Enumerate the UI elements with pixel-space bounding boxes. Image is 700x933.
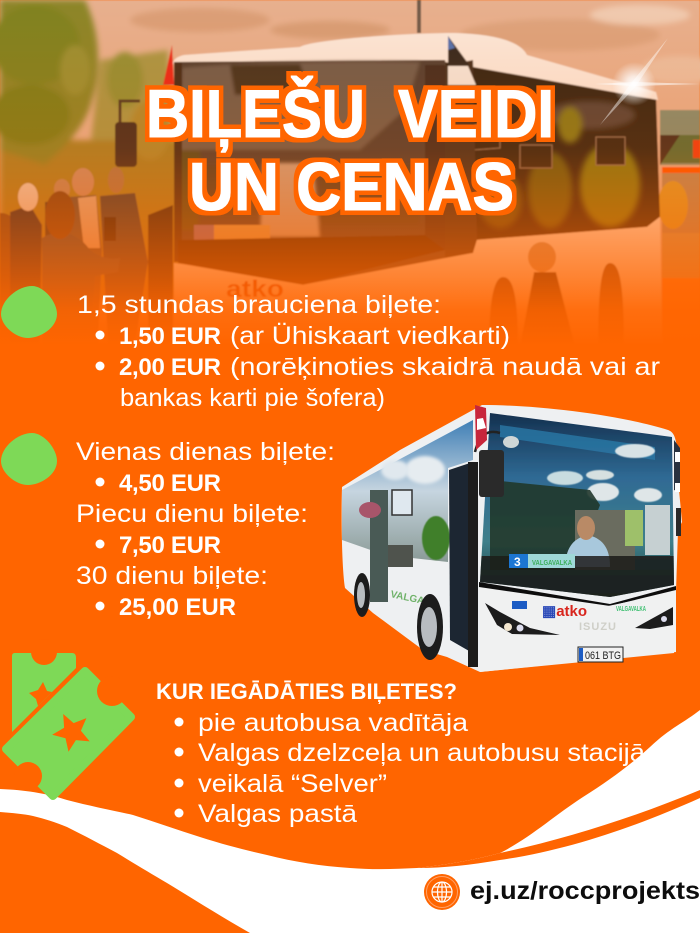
text block: day tickets: 4,50 EUR [119,470,221,497]
body [342,405,682,672]
side logo: VALGA [389,589,425,607]
bus roof [172,33,658,100]
door [449,462,476,655]
bus photo illustration: VALGAVALKA [532,560,572,567]
wheels [417,594,443,660]
text block: where to buy: Valgas dzelzceļa un autobusu stacijā [198,739,645,767]
text block: 1,5 hour ticket: bankas karti pie šofera) [120,384,385,412]
windshield [180,59,446,282]
rear ticket [12,653,76,732]
bus photo illustration: 061 BTG [585,650,621,662]
wheels [491,276,516,322]
text block: day tickets: 7,50 EUR [119,532,221,559]
icon: globe [424,874,460,910]
logo: ▦atko [542,603,587,620]
lamp post [417,0,421,33]
icon: green blob 2 [1,433,57,485]
side windows [342,420,473,562]
bus lower white body [173,216,661,303]
front ticket [6,671,131,796]
text block: where to buy: veikalā “Selver” [198,770,387,798]
flags [163,45,174,85]
building right [658,109,700,310]
bottom-left orange shape [0,812,250,933]
bus photo illustration: ISUZU [579,621,617,633]
icon: tickets [6,639,131,796]
bus photo illustration [342,405,682,672]
text block: 1,5 hour ticket: (ar Ühiskaart viedkarti) [230,322,510,350]
text block: 1,5 hour ticket: 2,00 EUR [119,354,221,381]
title: UN CENAS [189,149,514,225]
text block: day tickets: Vienas dienas biļete: [76,438,335,466]
number plate [578,647,623,662]
title: BIĻEŠU VEIDI [146,75,554,153]
bus side window [445,62,660,255]
title [146,75,554,225]
crowd [0,166,174,322]
orange swoosh [417,790,700,868]
heading: KUR IEGĀDĀTIES BIĻETES? [156,679,457,704]
dash [178,235,445,285]
windshield [480,413,674,597]
text block: 1,5 hour ticket [77,291,660,412]
text block: 1,5 hour ticket: 1,50 EUR [119,323,221,350]
boy [528,242,556,272]
mirror [475,432,500,452]
white wave shape [0,710,700,933]
front dash [479,582,676,606]
text block: day tickets: 25,00 EUR [119,594,236,621]
headlights [485,603,560,635]
route sign in windshield [194,225,214,240]
bus photo illustration: VALGAVALKA [616,606,646,613]
text block: day tickets: Piecu dienu biļete: [76,500,308,528]
orange photo overlay [0,0,700,345]
text block: where to buy: pie autobusa vadītāja [198,709,468,737]
bus photo illustration: 3 [514,555,521,569]
text block: day tickets: 30 dienu biļete: [76,562,268,590]
text block: where to buy: Valgas pastā [198,800,357,828]
text block: day tickets [76,438,335,621]
mirror [120,101,140,122]
icon: green blob 1 [1,286,57,338]
atko logo: atko [226,276,284,303]
text block: 1,5 hour ticket: 1,5 stundas brauciena biļete: [77,291,441,319]
website link: ej.uz/roccprojekts [470,877,700,905]
flag [475,405,487,450]
text block: 1,5 hour ticket: (norēķinoties skaidrā naudā vai ar [230,353,660,381]
route sign [509,554,528,568]
sun flare [595,38,700,125]
background photo: bus and crowd with orange overlay [0,0,700,345]
text block: where to buy [156,679,645,828]
